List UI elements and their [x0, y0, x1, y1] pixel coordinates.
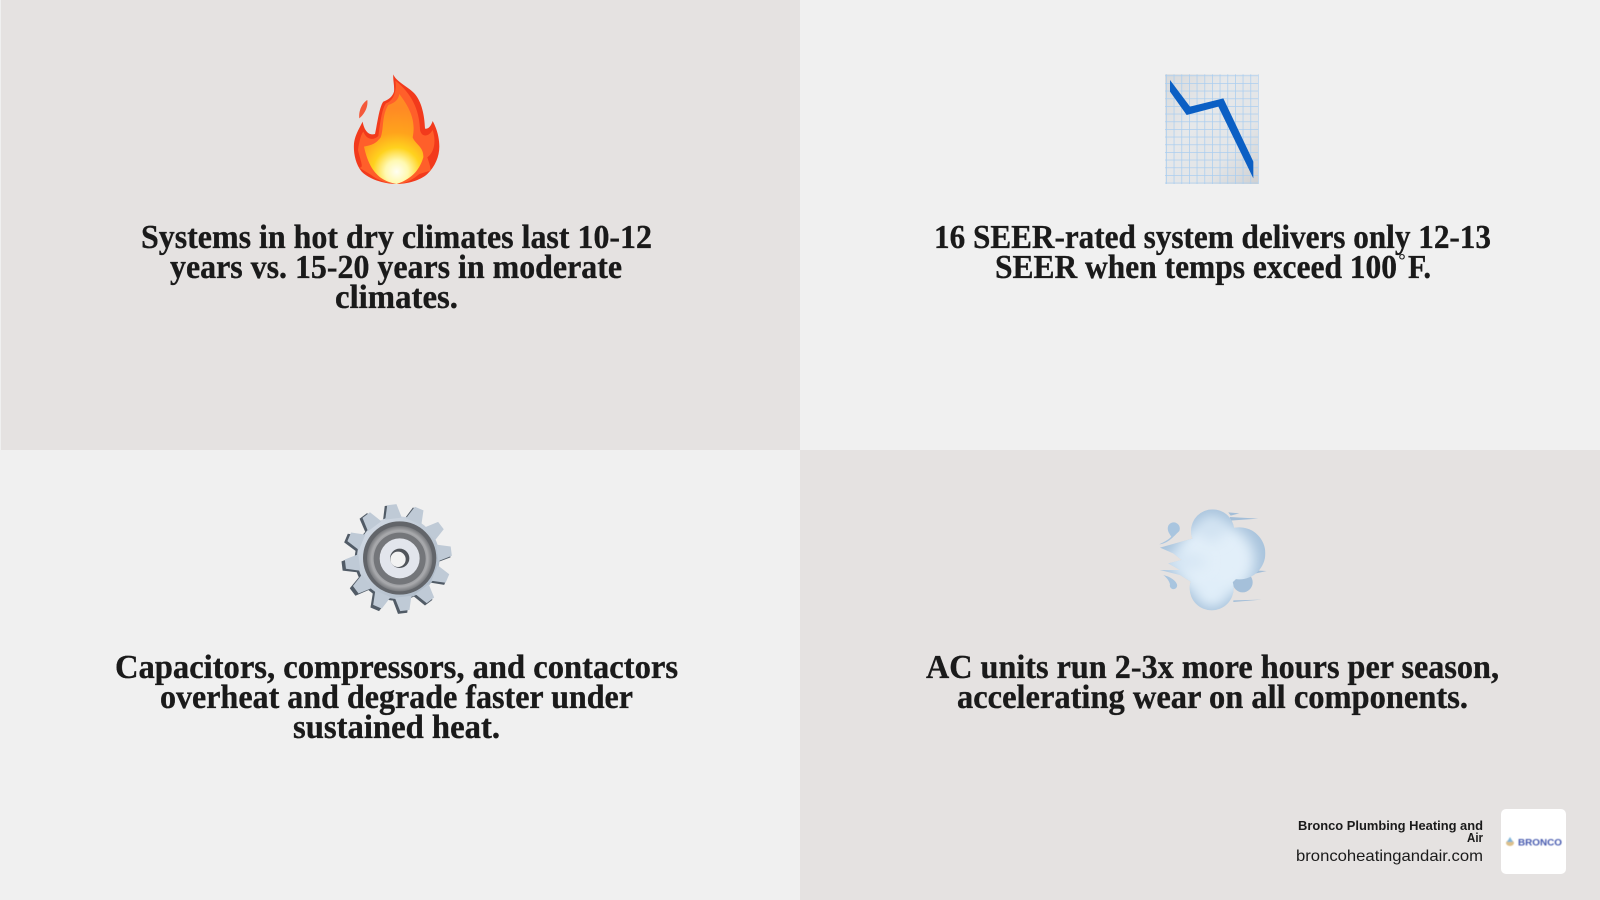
heading: SEER performance: SEER when temps exceed 100	[995, 249, 1397, 286]
heading: SEER performance	[934, 219, 1491, 286]
heading: climate lifespan: Systems in hot dry climates last 10-12	[141, 219, 652, 256]
logo card: BRONCO	[1518, 838, 1562, 848]
heading: runtime: accelerating wear on all components.	[957, 679, 1468, 716]
heading: climate lifespan: climates.	[335, 279, 458, 316]
panel: run hours	[800, 450, 1600, 900]
heading: runtime: AC units run 2-3x more hours per season,	[926, 649, 1499, 686]
heading: component wear	[115, 649, 678, 746]
heading: climate lifespan: years vs. 15-20 years in moderate	[170, 249, 622, 286]
brand attribution: Air	[1467, 831, 1483, 845]
heading: runtime	[926, 649, 1499, 716]
heading: climate lifespan	[141, 219, 652, 316]
icon: falling chart	[1165, 74, 1259, 184]
panel: hot dry climates	[1, 0, 800, 450]
heading: component wear: Capacitors, compressors, and contactors	[115, 649, 678, 686]
brand attribution: Bronco Plumbing Heating and	[1298, 819, 1483, 833]
icon: gear	[341, 504, 452, 614]
heading: component wear: sustained heat.	[293, 709, 500, 746]
logo card	[1501, 809, 1566, 874]
icon: dash of air	[1160, 510, 1266, 610]
brand attribution	[1296, 819, 1483, 865]
panel: component heat	[1, 450, 800, 900]
heading: component wear: overheat and degrade faster under	[160, 679, 633, 716]
brand attribution: broncoheatingandair.com	[1296, 848, 1483, 865]
icon: fire	[354, 74, 439, 184]
heading: SEER performance: 16 SEER-rated system delivers only 12-13	[934, 219, 1491, 256]
panel: SEER drop	[800, 0, 1600, 450]
heading: SEER performance: F.	[1408, 249, 1431, 286]
heading: SEER performance: °	[1398, 251, 1406, 273]
